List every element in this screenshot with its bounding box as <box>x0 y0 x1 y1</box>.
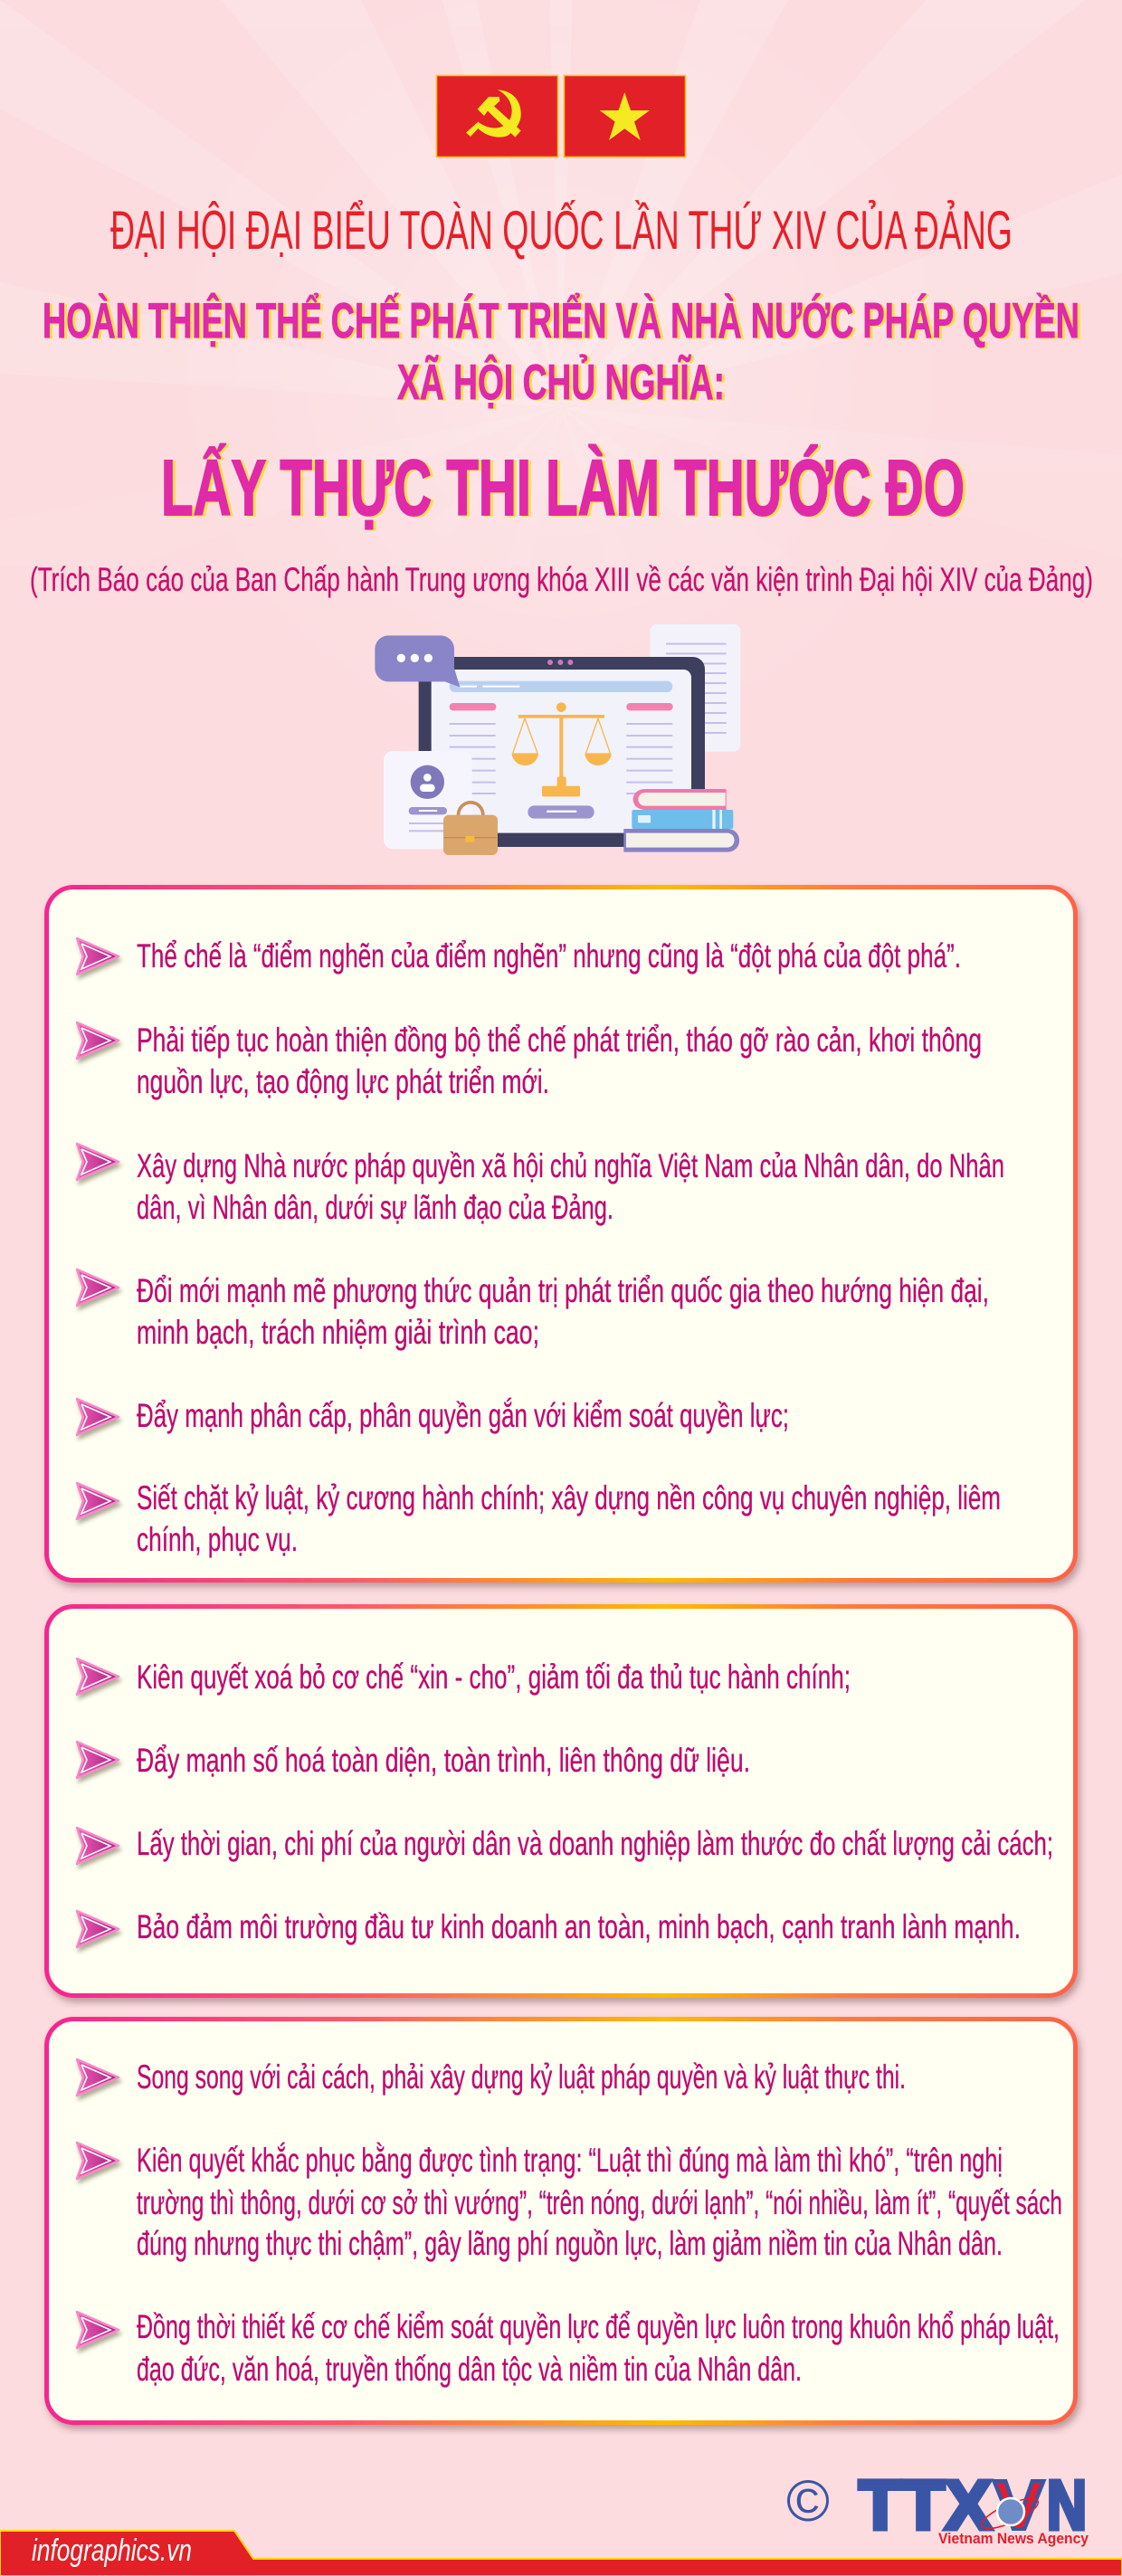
heading: main title lines <box>43 292 1079 410</box>
bullet: governance <box>77 1269 989 1351</box>
bullet: discipline: chính, phục vụ. <box>137 1521 298 1558</box>
tablet <box>419 657 705 847</box>
icon: speech bubble <box>375 635 460 687</box>
bullet: digitalisation <box>77 1742 750 1779</box>
background with sunburst rays <box>329 130 793 480</box>
panel: discipline and enforcement <box>47 2020 1075 2423</box>
bullet: digitalisation: Đẩy mạnh số hoá toàn diện, toàn trình, liên thông dữ liệu. <box>137 1742 750 1779</box>
logo: TTXVN Vietnam News Agency: TTX <box>859 2467 992 2544</box>
panel: institutional reform <box>47 887 1075 1580</box>
icon: briefcase <box>443 803 498 855</box>
logo: TTXVN Vietnam News Agency: V <box>994 2467 1044 2544</box>
icon: profile card <box>384 751 472 849</box>
icon: party flag with hammer and sickle <box>436 76 557 157</box>
logo: TTXVN Vietnam News Agency: N <box>1047 2467 1087 2544</box>
bullet: development institutions: nguồn lực, tạo động lực phát triển mới. <box>137 1063 549 1100</box>
flags <box>436 76 686 157</box>
icon: scales of justice <box>512 702 612 796</box>
bullet: discipline <box>77 1479 1001 1558</box>
bullet: power control <box>77 2308 1060 2388</box>
logo: TTXVN Vietnam News Agency: Vietnam News Agency <box>938 2530 1089 2547</box>
footer band <box>0 2531 1122 2576</box>
footer website label: infographics.vn <box>32 2533 192 2568</box>
heading: main title lines: XÃ HỘI CHỦ NGHĨA: <box>397 354 725 410</box>
bullet: rule of law state: dân, vì Nhân dân, dưới sự lãnh đạo của Đảng. <box>137 1189 613 1226</box>
bullet: decentralisation <box>77 1397 789 1435</box>
bullet: abolish ask-give <box>77 1659 851 1696</box>
bullet: governance: minh bạch, trách nhiệm giải trình cao; <box>137 1314 539 1351</box>
bullet: decentralisation: Đẩy mạnh phân cấp, phân quyền gắn với kiểm soát quyền lực; <box>137 1397 789 1434</box>
bullet: abolish ask-give: Kiên quyết xoá bỏ cơ chế “xin - cho”, giảm tối đa thủ tục hành chính; <box>137 1659 851 1696</box>
illustration: tablet with scales of justice, documents, briefcase and books <box>375 624 740 855</box>
bullet: power control: đạo đức, văn hoá, truyền thống dân tộc và niềm tin của Nhân dân. <box>137 2351 802 2388</box>
icon: copyright mark: © <box>786 2468 830 2533</box>
icon: national flag with star <box>565 76 686 157</box>
document behind tablet <box>650 624 740 752</box>
logo: TTXVN Vietnam News Agency <box>859 2467 1089 2547</box>
bullet: overcoming weak enforcement <box>77 2142 1062 2262</box>
icon: stack of books <box>623 789 739 852</box>
bullet: development institutions <box>77 1022 982 1100</box>
bullet: rule of law state <box>77 1144 1004 1226</box>
panel: administrative reform <box>47 1607 1075 1996</box>
